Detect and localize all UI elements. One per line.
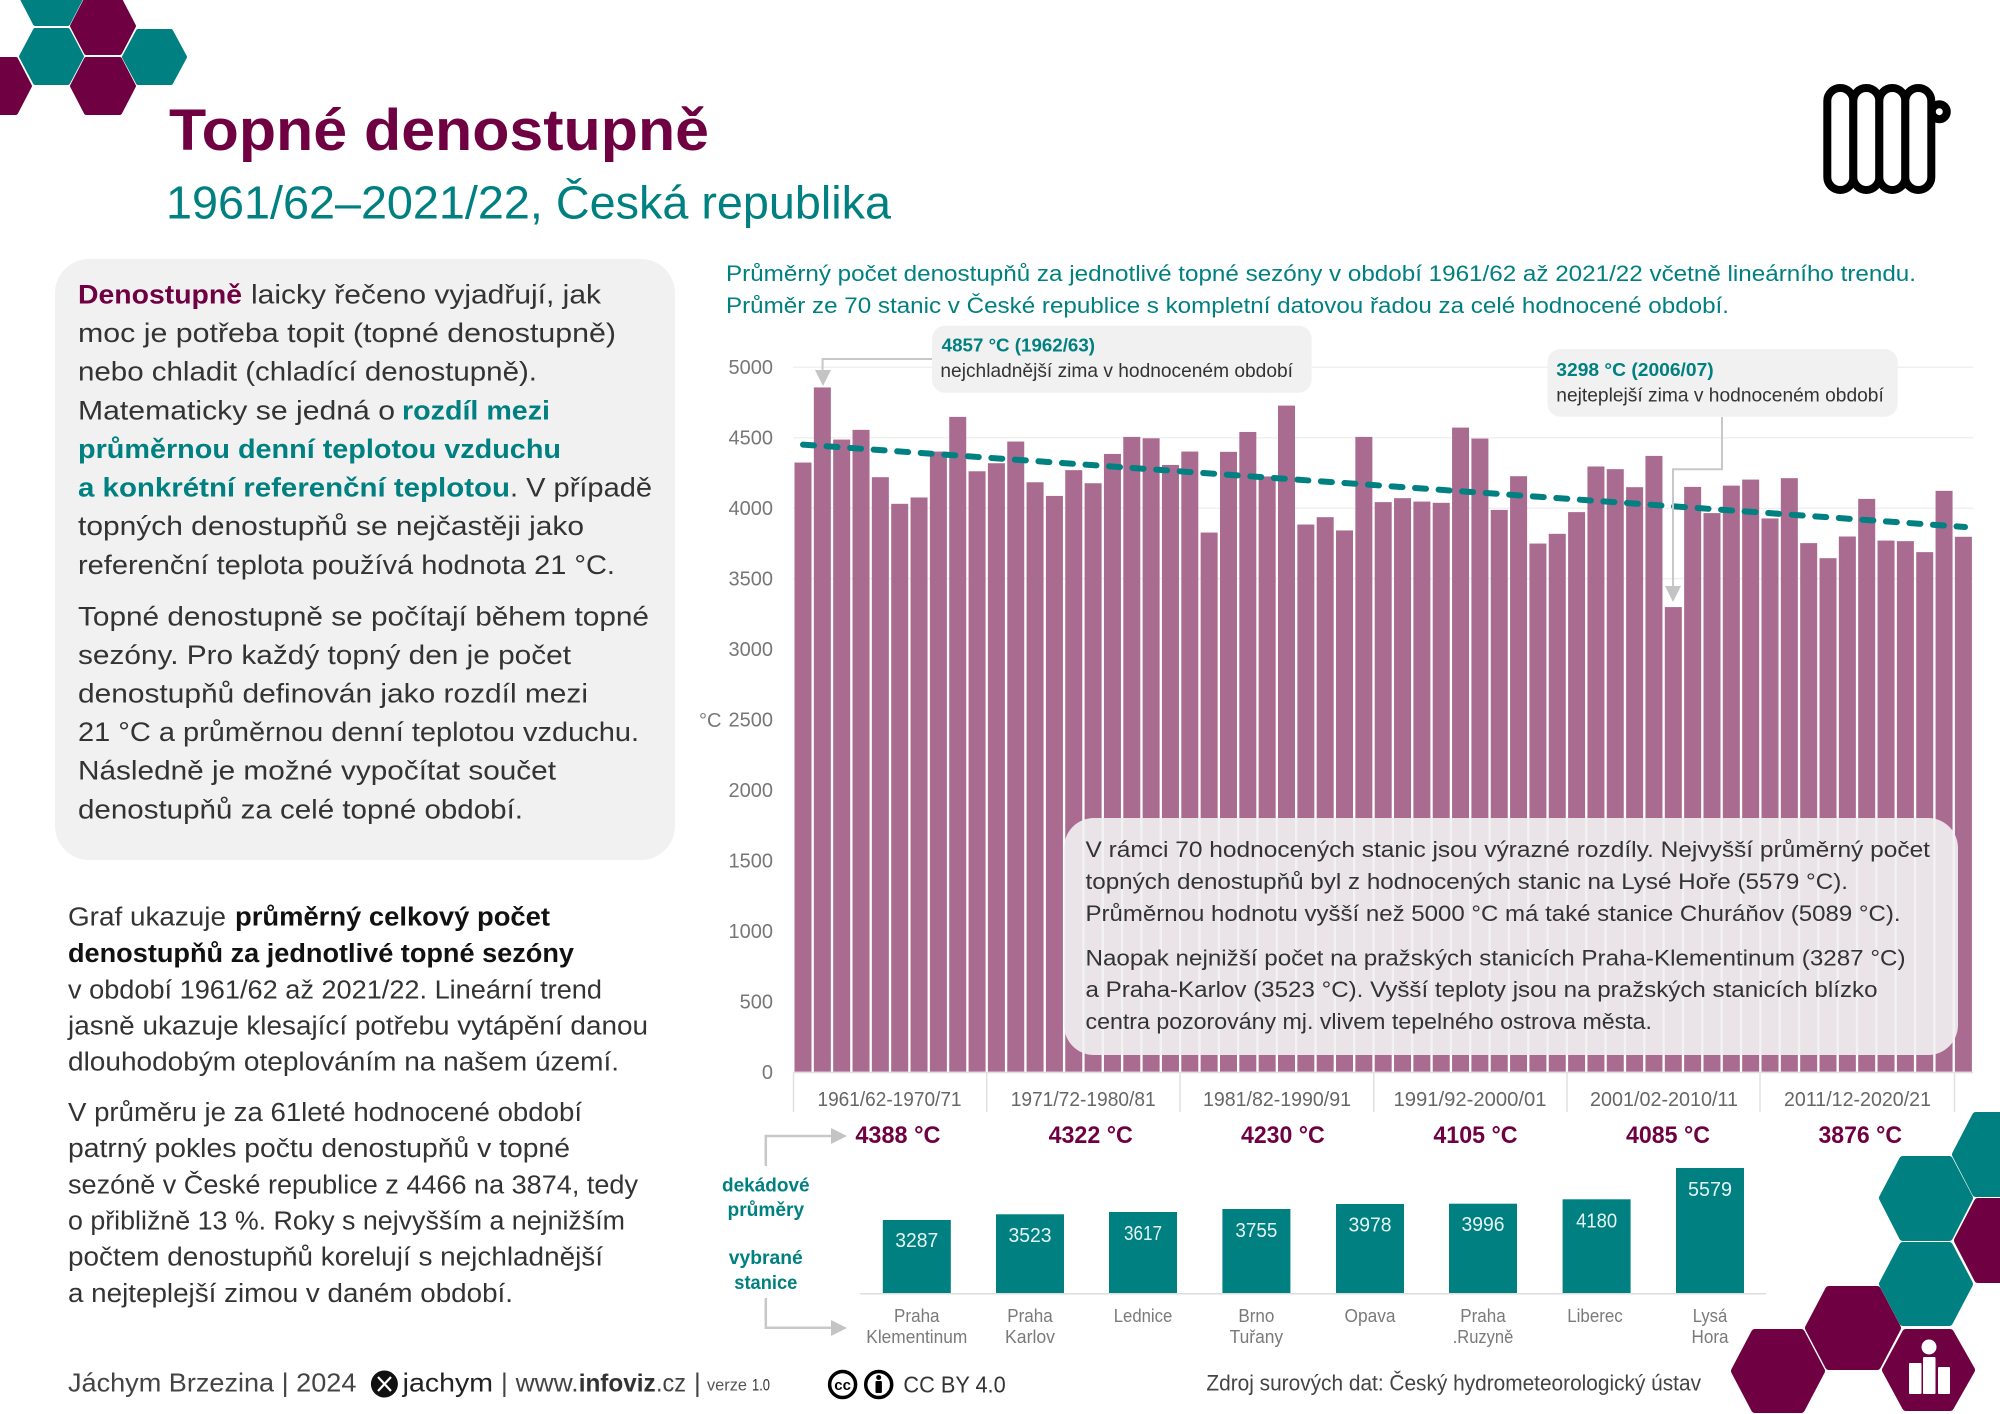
text block: chart explanation: dlouhodobým oteplováním na našem území. <box>68 1049 619 1077</box>
y axis with gridlines and labels: 4500 <box>728 428 773 450</box>
bar chart: selected stations: .Ruzyně <box>1453 1326 1513 1347</box>
icon: creative commons: cc <box>834 1377 851 1394</box>
panel: differences between stations: V rámci 70 hodnocených stanic jsou výrazné rozdíly. Nejvyšší průměrný počet <box>1086 837 1931 862</box>
panel: definition of degree days: sezóny. Pro každý topný den je počet <box>78 640 572 670</box>
callout: coldest winter: nejchladnější zima v hodnoceném období <box>940 360 1294 382</box>
y axis with gridlines and labels: 2000 <box>728 780 773 802</box>
text block: chart explanation: patrný pokles počtu denostupňů v topné <box>68 1135 570 1163</box>
panel: differences between stations: Průměrnou hodnotu vyšší než 5000 °C má také stanice Churáňov (5089 °C). <box>1086 901 1900 926</box>
footer: author and links: | <box>501 1368 508 1398</box>
icon: radiator <box>1827 88 1947 190</box>
footer: author and links: www. <box>515 1370 579 1398</box>
text block: chart explanation: denostupňů za jednotlivé topné sezóny <box>68 940 575 968</box>
callout: warmest winter <box>1548 349 1898 602</box>
bar chart: selected stations: Karlov <box>1005 1326 1056 1347</box>
arrow: to selected stations <box>766 1298 847 1336</box>
bar chart: selected stations: 3978 <box>1348 1215 1392 1237</box>
panel: definition of degree days: Denostupně <box>78 280 242 310</box>
footer: author and links: infoviz <box>579 1370 656 1398</box>
x axis with decade ticks and labels <box>793 1072 1973 1112</box>
panel: definition of degree days: Matematicky se jedná o <box>78 396 395 426</box>
chart description: Průměrný počet denostupňů za jednotlivé topné sezóny v období 1961/62 až 2021/22 včetně lineárního trendu. <box>726 261 1916 286</box>
bar chart: selected stations: 3755 <box>1235 1220 1277 1242</box>
y axis with gridlines and labels: 4000 <box>728 498 773 520</box>
decade averages <box>855 1122 1902 1149</box>
panel: definition of degree days: . V případě <box>510 473 652 503</box>
bar chart: selected stations: Liberec <box>1567 1305 1623 1326</box>
bar chart: selected stations: 3617 <box>1124 1223 1162 1245</box>
arrow: to decade averages <box>766 1128 847 1166</box>
footer: author and links: verze <box>707 1376 747 1395</box>
bar chart: heating degree days by season <box>699 357 1973 1112</box>
x axis with decade ticks and labels: 2001/02-2010/11 <box>1590 1088 1738 1111</box>
text block: chart explanation: V průměru je za 61leté hodnocené období <box>68 1099 582 1127</box>
panel: definition of degree days: moc je potřeba topit (topné denostupně) <box>78 318 616 348</box>
text block: chart explanation: Graf ukazuje <box>68 904 226 932</box>
bar chart: selected stations: 3523 <box>1008 1225 1052 1247</box>
y axis with gridlines and labels: 1500 <box>728 850 773 872</box>
label: decade averages: průměry <box>728 1199 804 1221</box>
y axis with gridlines and labels: 0 <box>762 1062 773 1084</box>
bar chart: selected stations: Lednice <box>1114 1305 1172 1326</box>
data source: Zdroj surových dat: Český hydrometeorologický ústav <box>1206 1371 1701 1396</box>
callout: warmest winter: 3298 °C (2006/07) <box>1556 360 1714 380</box>
bar chart: selected stations: Praha <box>1007 1305 1053 1326</box>
bar chart: selected stations: Opava <box>1344 1305 1396 1326</box>
y axis with gridlines and labels: 5000 <box>728 357 773 379</box>
panel: differences between stations: centra pozorovány mj. vlivem tepelného ostrova města. <box>1086 1009 1652 1034</box>
subtitle: 1961/62–2021/22, Česká republika <box>166 176 891 228</box>
bar chart: selected stations: Brno <box>1238 1305 1274 1326</box>
text block: chart explanation: počtem denostupňů korelují s nejchladnější <box>68 1244 603 1272</box>
y axis with gridlines and labels: 2500 <box>728 710 773 732</box>
label: selected stations: stanice <box>734 1272 797 1294</box>
panel: definition of degree days: a konkrétní referenční teplotou <box>78 473 510 503</box>
chart description <box>726 261 1916 318</box>
label: selected stations <box>729 1247 803 1294</box>
bar chart: selected stations: Tuřany <box>1230 1326 1284 1347</box>
panel: definition of degree days: topných denostupňů se nejčastěji jako <box>78 511 584 541</box>
callout: warmest winter: nejteplejší zima v hodnoceném období <box>1556 385 1884 407</box>
bar chart: selected stations: Hora <box>1692 1326 1729 1347</box>
callout: coldest winter <box>815 326 1312 393</box>
label: decade averages: dekádové <box>722 1174 810 1196</box>
panel: definition of degree days: 21 °C a průměrnou denní teplotou vzduchu. <box>78 717 639 747</box>
bars <box>794 387 1972 1072</box>
label: decade averages <box>722 1174 810 1221</box>
bar chart: selected stations: Praha <box>894 1305 940 1326</box>
panel: definition of degree days: denostupňů definován jako rozdíl mezi <box>78 678 588 708</box>
decade averages: 4388 °C <box>855 1122 940 1149</box>
decade averages: 4322 °C <box>1049 1122 1133 1149</box>
panel: definition of degree days: referenční teplota používá hodnota 21 °C. <box>78 550 615 580</box>
panel: definition of degree days: Topné denostupně se počítají během topné <box>78 602 649 632</box>
bar chart: selected stations: 3287 <box>895 1230 938 1252</box>
panel: definition of degree days: Následně je možné vypočítat součet <box>78 756 557 786</box>
y axis with gridlines and labels: 500 <box>740 992 773 1014</box>
text block: chart explanation: sezóně v České republice z 4466 na 3874, tedy <box>68 1170 638 1199</box>
y axis with gridlines and labels: °C <box>699 710 721 732</box>
icon: creative commons <box>830 1372 856 1398</box>
footer: author and links: Jáchym Brzezina | 2024 <box>68 1368 356 1398</box>
icon: X logo <box>371 1370 398 1398</box>
bar chart: selected stations <box>860 1168 1766 1347</box>
text block: chart explanation <box>67 904 648 1308</box>
callout: coldest winter: 4857 °C (1962/63) <box>942 336 1095 356</box>
bar chart: selected stations: Lysá <box>1693 1305 1728 1326</box>
footer: author and links: 1.0 <box>752 1376 770 1395</box>
bar chart: selected stations: Praha <box>1460 1305 1506 1326</box>
footer: author and links: | <box>694 1368 701 1398</box>
footer: author and links <box>68 1368 770 1398</box>
y axis with gridlines and labels: 3500 <box>728 568 773 590</box>
licence: CC BY <box>830 1372 1006 1398</box>
x axis with decade ticks and labels: 1991/92-2000/01 <box>1394 1088 1546 1111</box>
bar chart: selected stations: 5579 <box>1688 1179 1732 1201</box>
bar chart: selected stations: 3996 <box>1462 1214 1504 1236</box>
footer: author and links: jachym <box>402 1368 493 1398</box>
panel: definition of degree days: denostupňů za celé topné období. <box>78 794 523 824</box>
y axis with gridlines and labels: 1000 <box>728 921 773 943</box>
label: selected stations: vybrané <box>729 1247 803 1269</box>
y axis with gridlines and labels: 3000 <box>728 639 773 661</box>
x axis with decade ticks and labels: 1981/82-1990/91 <box>1203 1088 1351 1111</box>
footer: author and links: .cz <box>656 1370 686 1398</box>
panel: definition of degree days: průměrnou denní teplotou vzduchu <box>78 434 561 464</box>
chart description: Průměr ze 70 stanic v České republice s kompletní datovou řadou za celé hodnocené období. <box>726 293 1729 318</box>
decade averages: 4105 °C <box>1433 1122 1518 1149</box>
icon: person and bars <box>1909 1340 1950 1394</box>
text block: chart explanation: průměrný celkový počet <box>235 904 551 932</box>
x axis with decade ticks and labels: 2011/12-2020/21 <box>1784 1088 1931 1111</box>
decorative hexagon cluster: bottom right <box>1735 1116 2000 1409</box>
text block: chart explanation: o přibližně 13 %. Roky s nejvyšším a nejnižším <box>68 1208 625 1236</box>
bar chart: selected stations: Klementinum <box>866 1326 967 1347</box>
panel: differences between stations: Naopak nejnižší počet na pražských stanicích Praha-Klementinum (3287 °C) <box>1086 946 1906 970</box>
title: Topné denostupně <box>169 98 709 163</box>
text block: chart explanation: v období 1961/62 až 2021/22. Lineární trend <box>68 976 602 1004</box>
x axis with decade ticks and labels: 1961/62-1970/71 <box>818 1088 962 1111</box>
decade averages: 4085 °C <box>1626 1122 1710 1149</box>
x axis with decade ticks and labels: 1971/72-1980/81 <box>1011 1088 1156 1111</box>
decorative hexagon cluster: top left <box>0 0 185 113</box>
icon: attribution <box>866 1372 892 1398</box>
text block: chart explanation: a nejteplejší zimou v daném období. <box>68 1280 513 1308</box>
panel: definition of degree days: rozdíl mezi <box>402 396 550 426</box>
decade averages: 3876 °C <box>1818 1122 1902 1149</box>
linear trend line <box>803 445 1965 527</box>
panel: differences between stations: a Praha-Karlov (3523 °C). Vyšší teploty jsou na pražských stanicích blízko <box>1086 977 1878 1002</box>
panel: differences between stations <box>1064 818 1958 1055</box>
panel: definition of degree days: laicky řečeno vyjadřují, jak <box>251 280 602 310</box>
panel: definition of degree days <box>55 259 675 860</box>
panel: definition of degree days: nebo chladit (chladící denostupně). <box>78 356 537 386</box>
bar chart: selected stations: 4180 <box>1576 1211 1617 1233</box>
panel: differences between stations: topných denostupňů byl z hodnocených stanic na Lysé Hoře (5579 °C). <box>1086 869 1848 894</box>
y axis with gridlines and labels <box>699 357 1973 1084</box>
decade averages: 4230 °C <box>1241 1122 1325 1149</box>
licence: CC BY: CC BY 4.0 <box>903 1372 1006 1398</box>
text block: chart explanation: jasně ukazuje klesající potřebu vytápění danou <box>67 1013 648 1041</box>
